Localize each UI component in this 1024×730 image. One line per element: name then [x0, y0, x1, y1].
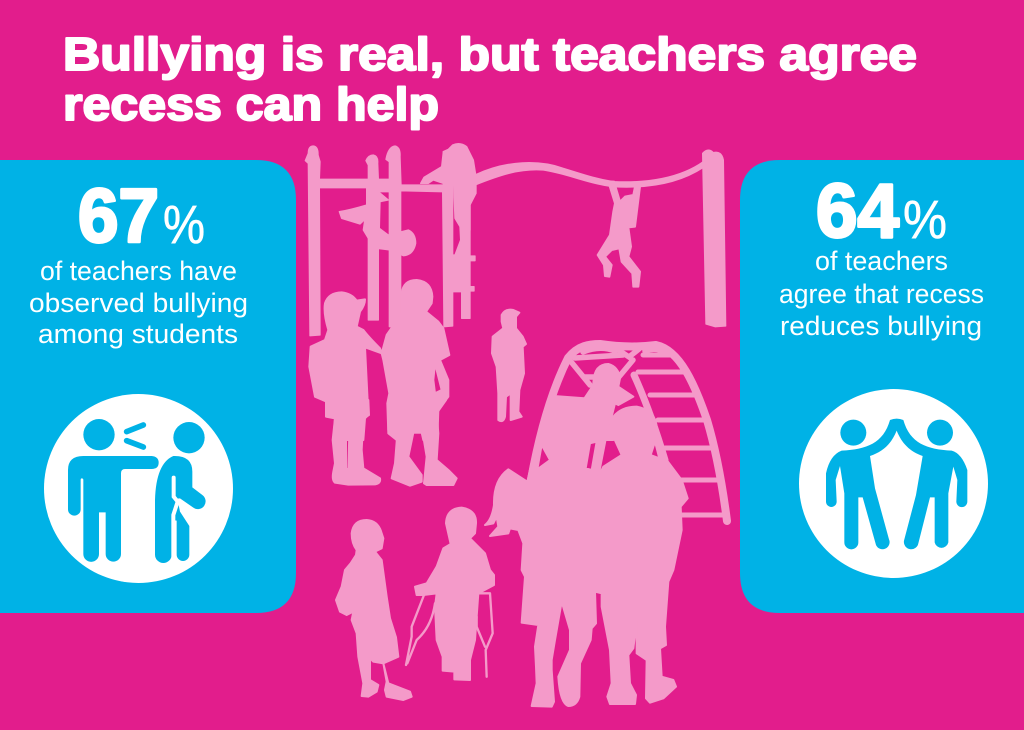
title: Bullying is real, but teachers agree — [63, 28, 917, 80]
text: observed bullying description: among students — [38, 319, 238, 349]
child standing beside — [382, 280, 449, 440]
group of children with backpack and cap — [309, 280, 633, 440]
climbing child on dome — [537, 364, 633, 440]
statistic: 67%: % — [163, 195, 205, 255]
small child in distance — [492, 310, 526, 421]
panel: teachers agreeing recess reduces bullying — [740, 160, 1024, 613]
text: observed bullying description: observed bullying — [29, 288, 248, 318]
text: observed bullying description: of teachers have — [40, 256, 237, 286]
two large children from behind — [485, 400, 688, 707]
children in the foreground — [326, 400, 688, 707]
statistic: 64%: 64 — [816, 169, 899, 254]
text: recess reduces bullying description: agree that recess — [779, 279, 984, 309]
legs of two children — [326, 400, 380, 485]
monkey bars and climbing frame — [305, 144, 726, 336]
title: recess can help — [63, 78, 439, 130]
icon: two people high-fiving — [799, 389, 988, 578]
child with cap and backpack — [309, 292, 382, 440]
child with crutches — [406, 508, 494, 680]
dome climber frame — [531, 344, 727, 521]
text: recess reduces bullying description: reduces bullying — [780, 311, 982, 341]
statistic: 64%: % — [903, 190, 947, 250]
child on top of bars — [421, 144, 476, 255]
icon: person shouting at another person — [44, 394, 233, 583]
panel: teachers observing bullying — [0, 160, 296, 613]
statistic: 67% — [78, 174, 205, 259]
text: recess reduces bullying description — [779, 246, 984, 341]
illustration: playground silhouettes — [305, 144, 727, 707]
statistic: 67%: 67 — [78, 174, 159, 259]
child hanging from bar — [598, 182, 640, 287]
statistic: 64% — [816, 169, 947, 254]
child walking — [336, 520, 412, 700]
text: observed bullying description — [29, 256, 248, 349]
child climbing — [339, 187, 416, 256]
text: recess reduces bullying description: of teachers — [815, 246, 948, 276]
title — [63, 28, 917, 130]
